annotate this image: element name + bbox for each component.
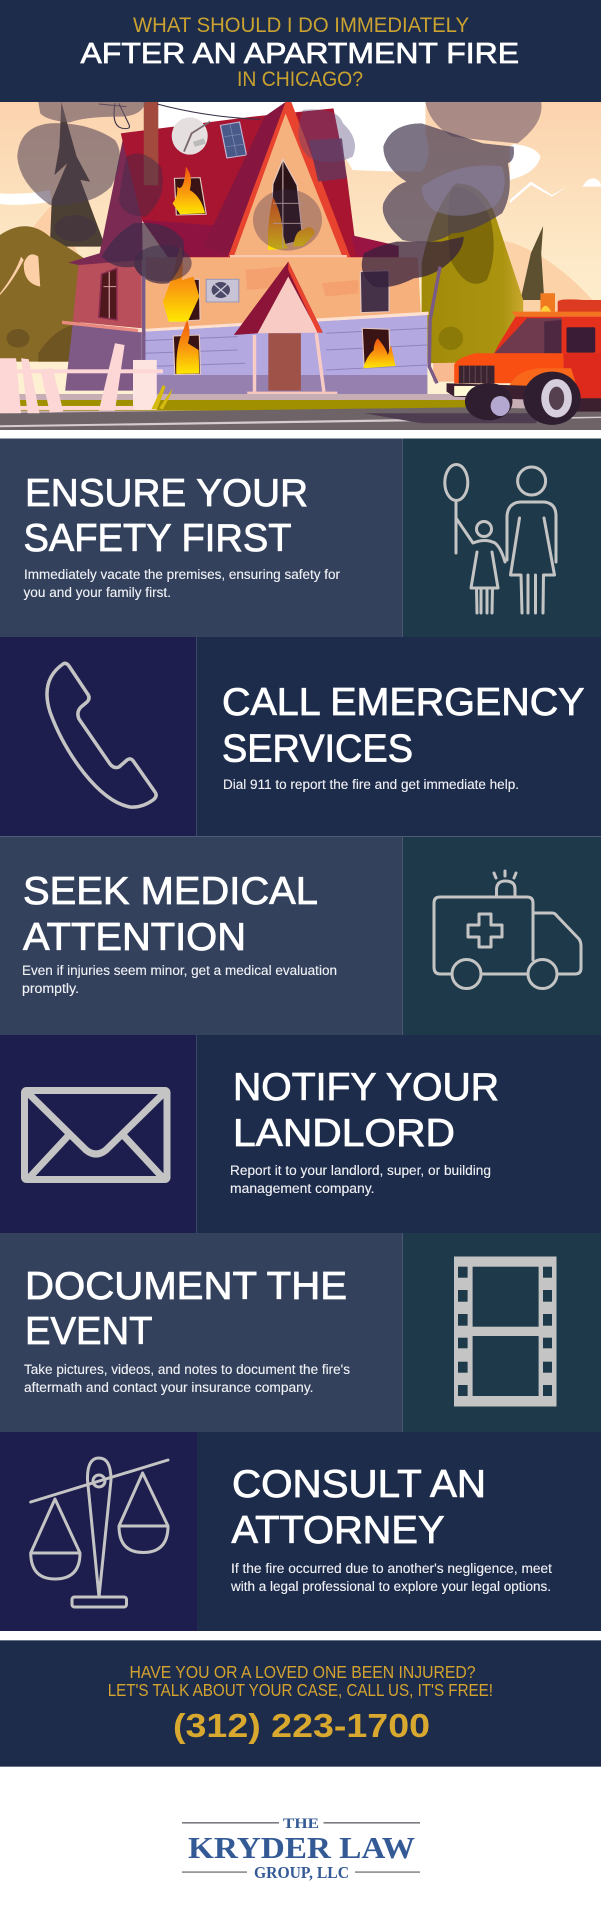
row 4: notify your landlord: LANDLORD: [233, 1112, 455, 1155]
antenna wires: [99, 103, 261, 129]
logo: the Kryder Law Group: [182, 1816, 420, 1882]
heading: CONSULT AN: [232, 1463, 486, 1506]
ground: [0, 394, 601, 430]
header: title band: [0, 0, 601, 102]
title line 3: IN CHICAGO?: [237, 68, 363, 91]
row 6: consult an attorney: with a legal professional to explore your legal options.: [230, 1579, 551, 1594]
row 3: seek medical attention: promptly.: [22, 981, 79, 996]
smoke clouds right: [362, 102, 542, 287]
call to action band: [0, 1640, 601, 1767]
phone number: (312) 223-1700: [173, 1708, 430, 1745]
body text: Even if injuries seem minor, get a medical evaluation: [22, 963, 337, 978]
icon: scales of justice: [31, 1458, 168, 1607]
row 5: document the event: aftermath and contact your insurance company.: [24, 1380, 314, 1395]
air conditioner: [206, 279, 239, 302]
row 1: ensure your safety first: you and your family first.: [24, 585, 171, 600]
fire truck: [447, 293, 601, 425]
icon: ambulance: [434, 871, 581, 988]
row 1: ensure your safety first: [0, 438, 601, 637]
small right tree: [521, 226, 544, 300]
call to action text: HAVE YOU OR A LOVED ONE BEEN INJURED?: [130, 1662, 476, 1682]
icon: envelope: [24, 1090, 167, 1180]
heading: CALL EMERGENCY: [222, 681, 584, 724]
row 1: ensure your safety first: SAFETY FIRST: [24, 517, 292, 560]
windows with flames: [163, 159, 396, 375]
row 4: notify your landlord: management company.: [230, 1181, 374, 1196]
logo: the Kryder Law Group: KRYDER LAW: [188, 1830, 415, 1865]
sky clouds: [153, 102, 429, 172]
body text: Immediately vacate the premises, ensuring safety for: [24, 567, 340, 582]
row 3: seek medical attention: [0, 836, 601, 1035]
right olive tree: [422, 183, 523, 363]
row 5: document the event: [0, 1233, 601, 1432]
icon: parent and child with balloon: [445, 464, 556, 613]
row 4: notify your landlord: [0, 1035, 601, 1233]
row 2: call emergency services: [0, 637, 601, 836]
heading: ENSURE YOUR: [25, 472, 308, 515]
siding: [144, 315, 427, 394]
main roof: [121, 108, 399, 258]
title line 2: AFTER AN APARTMENT FIRE: [80, 38, 519, 70]
heading: NOTIFY YOUR: [233, 1066, 499, 1109]
main gable: [232, 112, 343, 257]
smoke clouds left: [17, 102, 355, 284]
row 3: seek medical attention: ATTENTION: [23, 916, 246, 959]
logo: the Kryder Law Group: GROUP, LLC: [254, 1863, 349, 1882]
house left wing: [73, 257, 142, 328]
left olive bush: [0, 226, 86, 362]
porch: [234, 262, 337, 395]
solar panel: [220, 122, 246, 158]
hills: [0, 203, 84, 333]
icon: film strip: [454, 1256, 556, 1406]
body text: If the fire occurred due to another's negligence, meet: [231, 1561, 552, 1576]
broken fence: [0, 343, 172, 413]
body text: Take pictures, videos, and notes to document the fire's: [24, 1362, 350, 1377]
satellite dish: [172, 117, 210, 155]
heading: SEEK MEDICAL: [23, 870, 318, 913]
chimney: [144, 102, 158, 185]
body text: Report it to your landlord, super, or building: [230, 1163, 491, 1178]
shutter boards: [309, 138, 347, 182]
lower facade: [146, 257, 421, 330]
row 5: document the event: EVENT: [25, 1310, 152, 1353]
row 2: call emergency services: SERVICES: [222, 728, 413, 770]
icon: telephone handset: [47, 663, 156, 807]
body text: Dial 911 to report the fire and get immediate help.: [223, 777, 519, 792]
left dark tree: [50, 102, 105, 247]
power pole: [144, 267, 440, 383]
row 6: consult an attorney: [0, 1432, 601, 1631]
call to action band: LET'S TALK ABOUT YOUR CASE, CALL US, IT'S FREE!: [108, 1680, 493, 1700]
heading: DOCUMENT THE: [25, 1265, 347, 1308]
row 6: consult an attorney: ATTORNEY: [232, 1509, 444, 1552]
logo: the Kryder Law Group: THE: [283, 1816, 319, 1832]
illustration: house on fire with fire truck: [0, 102, 601, 430]
left wing dark roof: [68, 140, 143, 265]
title line 1: WHAT SHOULD I DO IMMEDIATELY: [133, 14, 469, 37]
